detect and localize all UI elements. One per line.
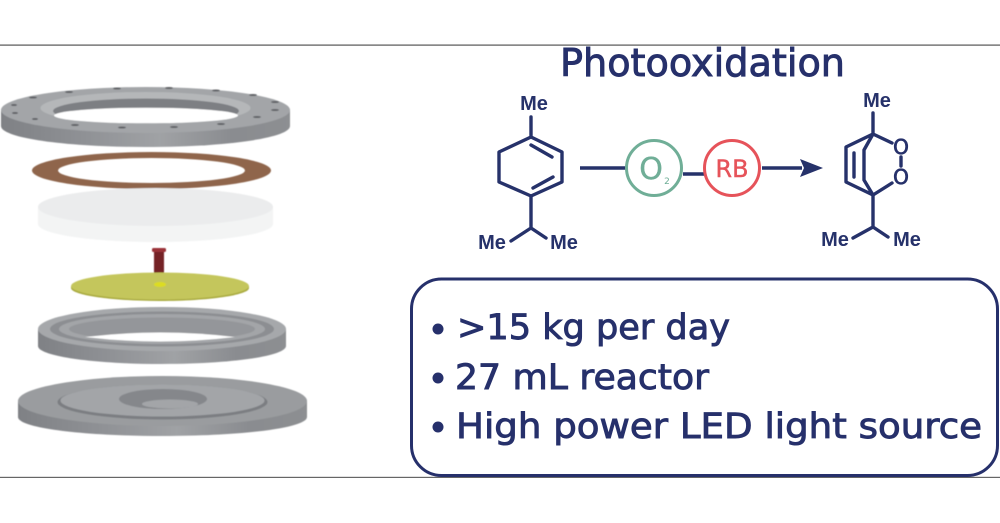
- arrow with reagents: [580, 140, 823, 196]
- bullet: light source: High power LED light source: [456, 407, 982, 447]
- product molecule: O: [893, 135, 909, 159]
- O2 reagent circle: 2: [664, 177, 670, 187]
- white window disc: [38, 188, 273, 242]
- product molecule: O: [893, 165, 909, 189]
- bullet: reactor volume: 27 mL reactor: [455, 358, 710, 398]
- yellow circuit disc: [71, 272, 249, 301]
- top flange ring: [1, 87, 290, 147]
- arrow head: [800, 159, 823, 177]
- bullet: throughput: >15 kg per day: [457, 308, 730, 348]
- red LED post: [152, 248, 166, 273]
- callout box: key features: [412, 279, 998, 476]
- O2 reagent circle: O: [639, 152, 663, 187]
- bottom base plate: [18, 376, 307, 436]
- copper gasket: [32, 152, 271, 189]
- product molecule: [821, 90, 921, 251]
- middle ring: [38, 307, 286, 364]
- reactant molecule: Me: [550, 232, 578, 254]
- reactant molecule: Me: [478, 232, 506, 254]
- RB reagent circle: [704, 140, 760, 196]
- product molecule: Me: [863, 90, 891, 112]
- RB reagent circle: RB: [716, 155, 748, 183]
- title: Photooxidation: [560, 41, 845, 85]
- reactant molecule: [478, 93, 578, 254]
- product molecule: Me: [893, 229, 921, 251]
- exploded reactor diagram: [1, 87, 307, 436]
- reactant molecule: Me: [520, 93, 548, 115]
- product molecule: Me: [821, 229, 849, 251]
- reaction scheme: [478, 90, 921, 254]
- O2 reagent circle: [626, 140, 682, 196]
